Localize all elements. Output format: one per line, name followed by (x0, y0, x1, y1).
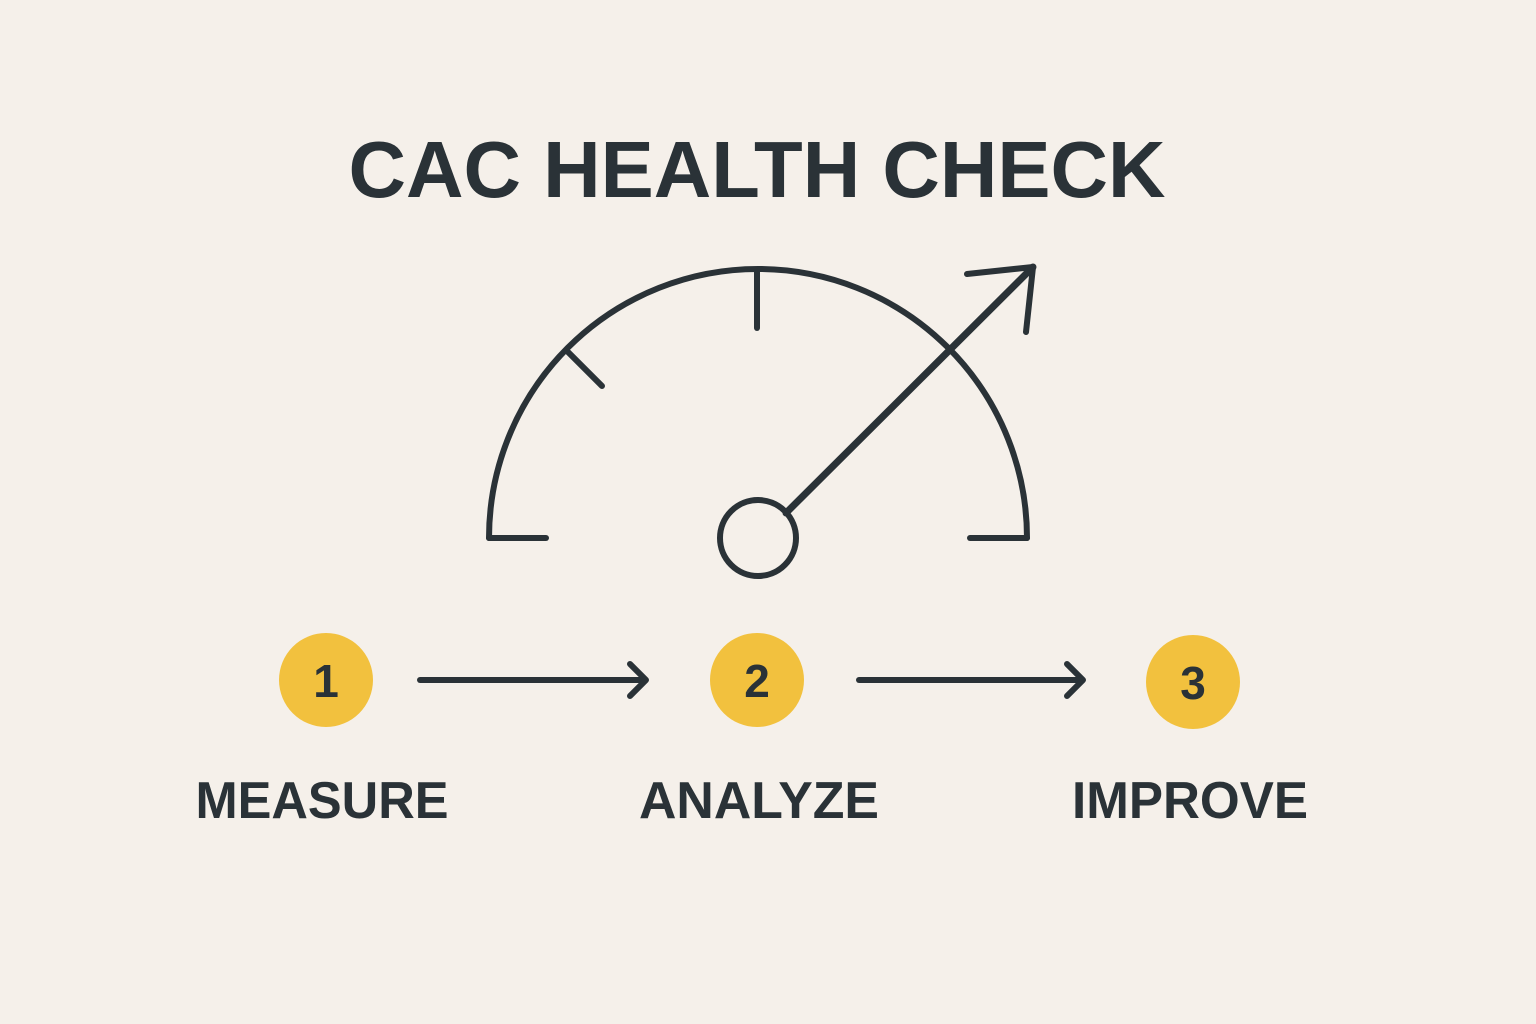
gauge icon (489, 267, 1033, 576)
step 2: analyze (639, 633, 879, 830)
step 1: measure (196, 633, 448, 830)
arrow 1 to 2 (420, 664, 646, 696)
step 2: analyze: ANALYZE (639, 772, 879, 830)
step 3: improve (1072, 635, 1308, 830)
step 1: measure: 1 (313, 655, 339, 707)
step 3: improve: 3 (1180, 657, 1206, 709)
step 3: improve: IMPROVE (1072, 772, 1308, 830)
step 1: measure: MEASURE (196, 772, 448, 830)
step 2: analyze: 2 (744, 655, 770, 707)
title: CAC HEALTH CHECK (348, 125, 1166, 214)
arrow 2 to 3 (859, 664, 1083, 696)
